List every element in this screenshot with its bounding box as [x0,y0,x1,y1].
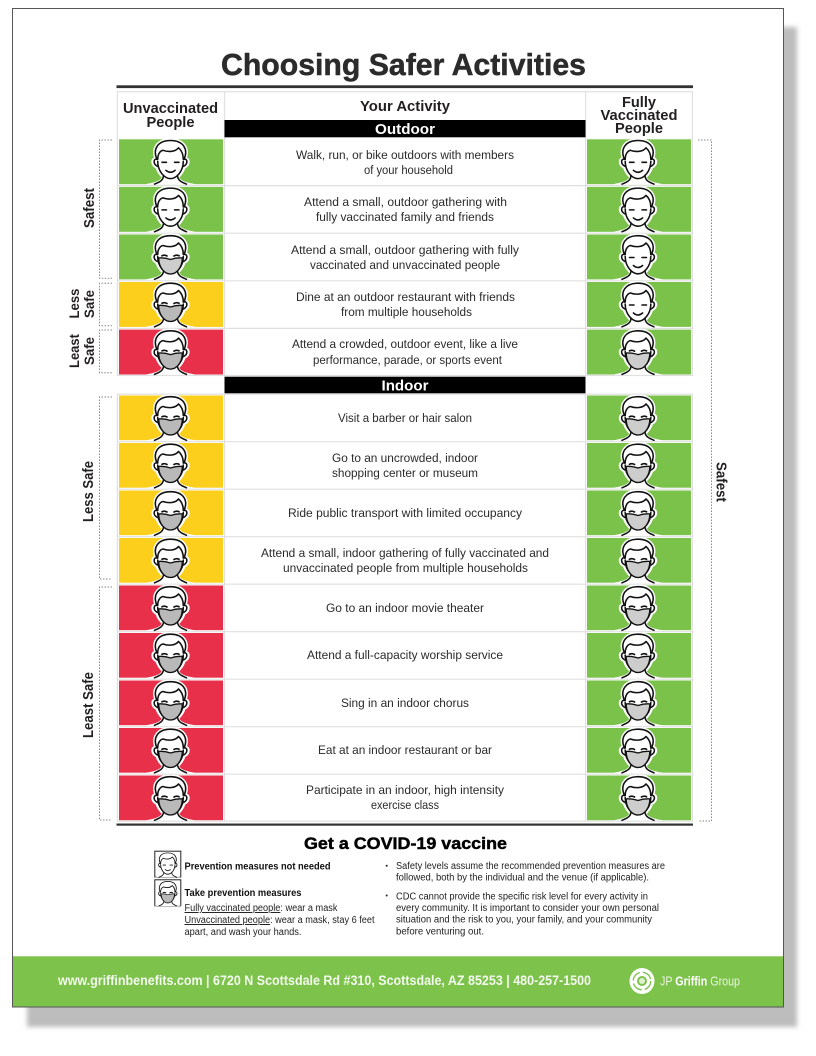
activity list: indoor: Sing in an indoor chorus [341,696,469,710]
notes: safety bullets: followed, both by the individual and the venue (if applicable). [396,873,649,884]
left labels: safety levels [66,188,98,738]
footer band [13,956,783,1006]
activity list: indoor: Ride public transport with limited occupancy [288,506,523,520]
activity list: outdoor: Attend a small, outdoor gathering with fully [291,243,520,257]
notes: safety bullets: every community. It is important to consider your own personal [396,903,659,914]
right label: safest: Safest [712,462,730,502]
band: indoor: Indoor [382,378,429,394]
activity list: outdoor: Dine at an outdoor restaurant with friends [296,290,515,304]
header: unvaccinated people: Unvaccinated [123,100,218,117]
activity list: indoor [261,411,549,812]
activity list: outdoor: from multiple households [341,305,472,319]
left labels: safety levels: Safest [81,188,98,228]
activity list: outdoor [291,148,520,367]
notes: safety bullets: situation and the risk to you, your family, and your community [396,915,652,926]
activity list: indoor: shopping center or museum [332,466,478,480]
header: fully vaccinated people: People [615,120,663,137]
header: fully vaccinated people [600,94,678,137]
legend: take prevention measures: apart, and wash your hands. [184,927,302,938]
icons: vaccinated faces [613,140,663,820]
header: your activity: Your Activity [360,98,451,115]
legend: take prevention measures: Fully vaccinated people: wear a mask [184,903,338,914]
activity list: indoor: Participate in an indoor, high intensity [306,783,505,797]
activity list: indoor: exercise class [371,798,439,812]
vaccine heading: Get a COVID-19 vaccine [304,835,507,853]
activity list: outdoor: performance, parade, or sports event [313,353,503,367]
left labels: safety levels: Less [66,288,82,318]
top rule [116,85,693,88]
activity list: indoor: Go to an indoor movie theater [326,601,484,615]
band: outdoor: Outdoor [375,122,435,138]
table grid [117,92,692,821]
left labels: safety levels: Safe [81,290,97,318]
left labels: safety levels: Safe [81,337,97,365]
left labels: safety levels: Less Safe [81,461,97,522]
vaccinated column colour cells [587,139,691,820]
logo: JP Griffin Group [630,968,740,994]
header: fully vaccinated people: Vaccinated [600,107,678,124]
header: unvaccinated people [123,100,218,131]
header: fully vaccinated people: Fully [622,94,657,111]
legend: take prevention measures: Take prevention measures [184,888,302,899]
notes: safety bullets: before venturing out. [396,926,484,937]
icons: unvaccinated faces [146,140,196,820]
notes: safety bullets [386,861,666,937]
activity list: indoor: unvaccinated people from multiple households [283,561,528,575]
left labels: safety levels: Least Safe [81,672,97,738]
activity list: indoor: Eat at an indoor restaurant or bar [318,743,492,757]
legend: take prevention measures [154,880,375,938]
unvaccinated column colour cells [119,139,223,820]
legend: prevention measures not needed: Prevention measures not needed [184,862,330,872]
legend: prevention measures not needed [154,851,330,877]
activity list: outdoor: Attend a crowded, outdoor event, like a live [292,337,518,351]
activity list: outdoor: Walk, run, or bike outdoors with members [296,148,514,162]
notes: safety bullets: Safety levels assume the recommended prevention measures are [396,861,666,872]
activity list: outdoor: of your household [364,163,453,177]
activity list: outdoor: vaccinated and unvaccinated people [310,258,500,272]
bottom rule [116,824,693,826]
activity list: outdoor: fully vaccinated family and friends [316,210,494,224]
band: indoor [224,377,586,394]
right bracket [698,140,712,821]
activity list: indoor: Visit a barber or hair salon [338,411,472,425]
band: outdoor [224,120,586,138]
footer contact line: www.griffinbenefits.com | 6720 N Scottsdale Rd #310, Scottsdale, AZ 85253 | 480-257-1500 [57,973,591,988]
header: unvaccinated people: People [146,114,194,131]
activity list: indoor: Attend a small, indoor gathering of fully vaccinated and [261,546,549,560]
activity list: indoor: Attend a full-capacity worship service [307,648,503,662]
title: Choosing Safer Activities [221,47,586,82]
legend: take prevention measures: Unvaccinated people: wear a mask, stay 6 feet [184,915,375,926]
logo: JP Griffin Group: JP Griffin Group [660,974,740,988]
left brackets [100,140,112,820]
notes: safety bullets: CDC cannot provide the specific risk level for every activity in [396,891,648,902]
activity list: outdoor: Attend a small, outdoor gathering with [304,195,507,209]
activity list: indoor: Go to an uncrowded, indoor [332,451,478,465]
left labels: safety levels: Least [66,334,82,368]
